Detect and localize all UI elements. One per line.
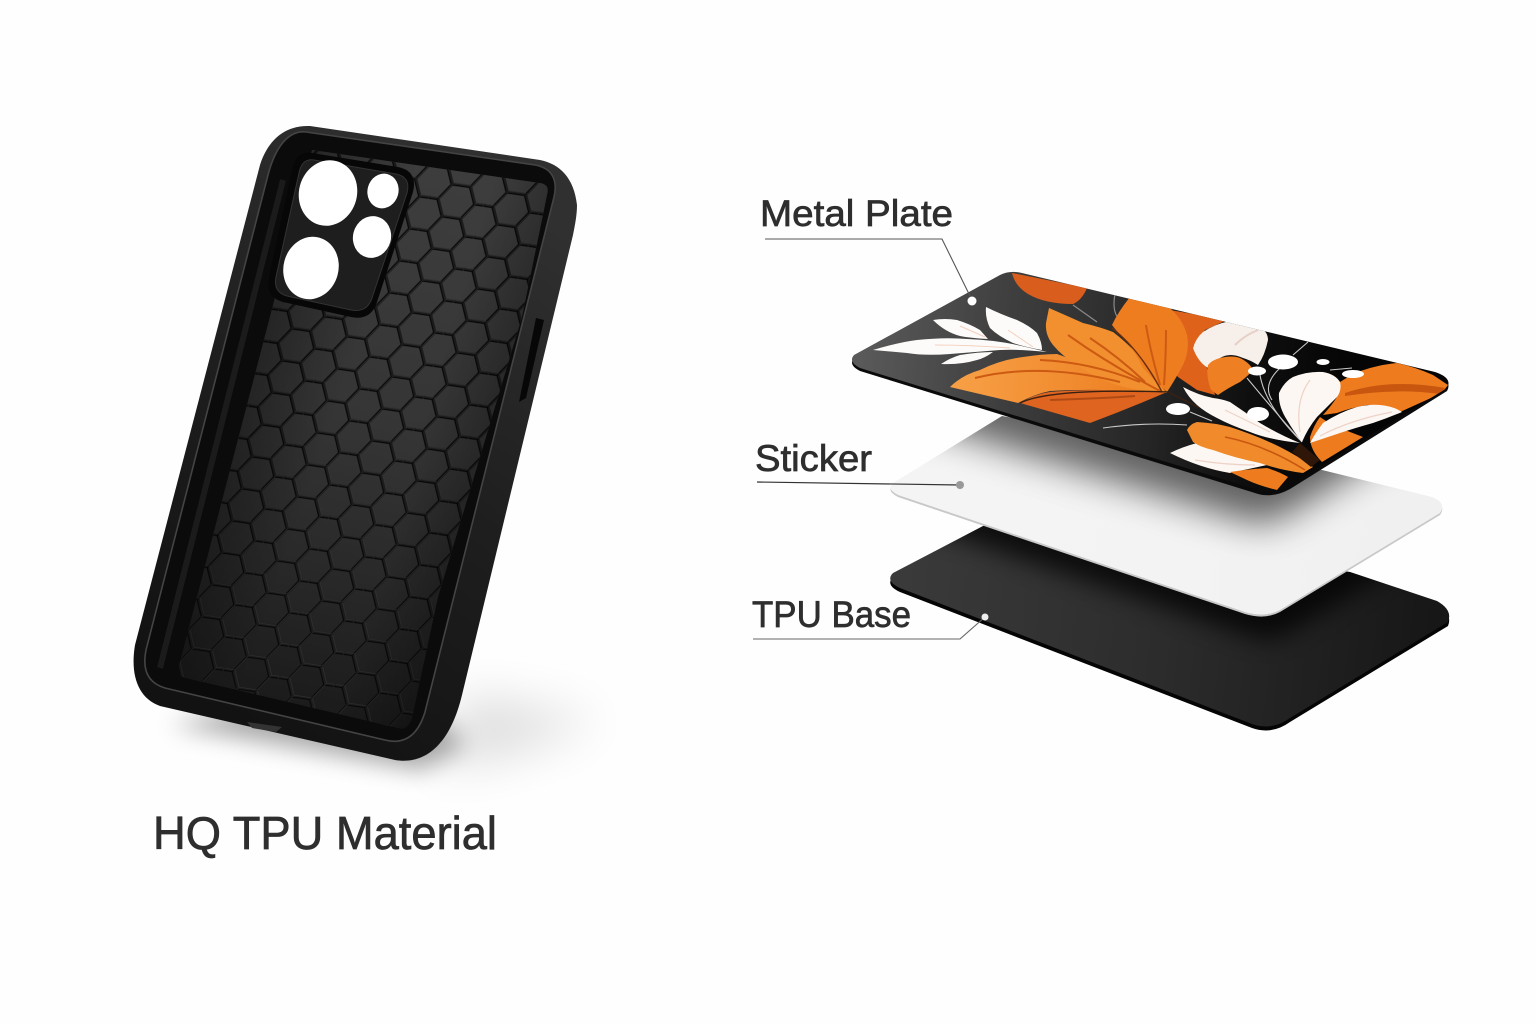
label: Metal Plate: Metal Plate [760, 193, 953, 234]
leaf veins [975, 325, 1166, 400]
honeycomb inner floor [178, 150, 548, 728]
inner wall highlights [160, 180, 283, 668]
camera module [268, 153, 414, 318]
caption: HQ TPU Material: HQ TPU Material [153, 807, 497, 859]
label: Sticker: Sticker [755, 438, 872, 479]
label: Metal Plate [760, 193, 976, 306]
case side buttons [223, 285, 544, 402]
stems near top [1073, 294, 1118, 322]
white dots [1166, 354, 1364, 421]
layer: TPU base [890, 526, 1450, 730]
layer: sticker [890, 416, 1442, 617]
dark orange leaves [1012, 273, 1087, 304]
thin stems [1103, 342, 1352, 442]
camera lens holes [276, 154, 403, 306]
phone cast shadow [170, 695, 600, 770]
label: TPU Base [752, 594, 988, 639]
plate artwork [852, 272, 1448, 490]
orange leaves bottom [1187, 422, 1313, 473]
case inner channel and rim [145, 132, 555, 741]
orange leaf right [1323, 363, 1448, 415]
layer: metal plate [852, 272, 1448, 496]
white petal and small orange leaf [1193, 321, 1268, 368]
phone case [134, 126, 600, 770]
plate edge [852, 275, 1448, 495]
case outer body [134, 126, 577, 761]
case bottom button bumps [247, 722, 282, 732]
white leaves left [873, 307, 1047, 364]
large orange leaves [1020, 390, 1167, 423]
veins on white leaves [935, 326, 1033, 348]
white leaves right [1170, 372, 1402, 473]
label: Sticker [755, 438, 964, 489]
label: TPU Base: TPU Base [752, 594, 911, 635]
